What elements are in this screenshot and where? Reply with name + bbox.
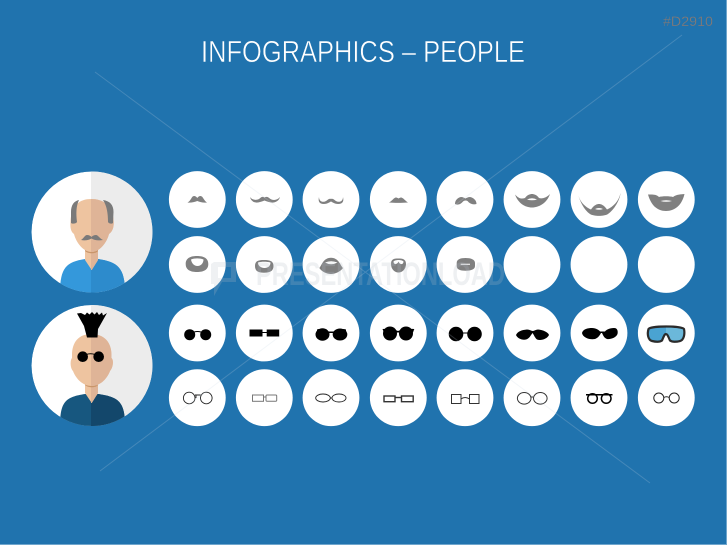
icon row: moustaches and beards (186, 193, 684, 274)
title: INFOGRAPHICS – PEOPLE (201, 35, 525, 69)
code label: #D2910 (663, 13, 713, 29)
watermark: PRESENTATIONLOAD (211, 256, 505, 296)
avatar: man with moustache (32, 170, 154, 294)
avatar: man with mohawk and sunglasses (32, 304, 154, 428)
icon row: outline glasses (183, 392, 679, 404)
icon: ski goggles (648, 326, 684, 342)
watermark: PRESENTATIONLOAD: PRESENTATIONLOAD (256, 256, 505, 292)
icon grid: white circles (169, 171, 695, 426)
icon row: sunglasses (184, 326, 618, 341)
